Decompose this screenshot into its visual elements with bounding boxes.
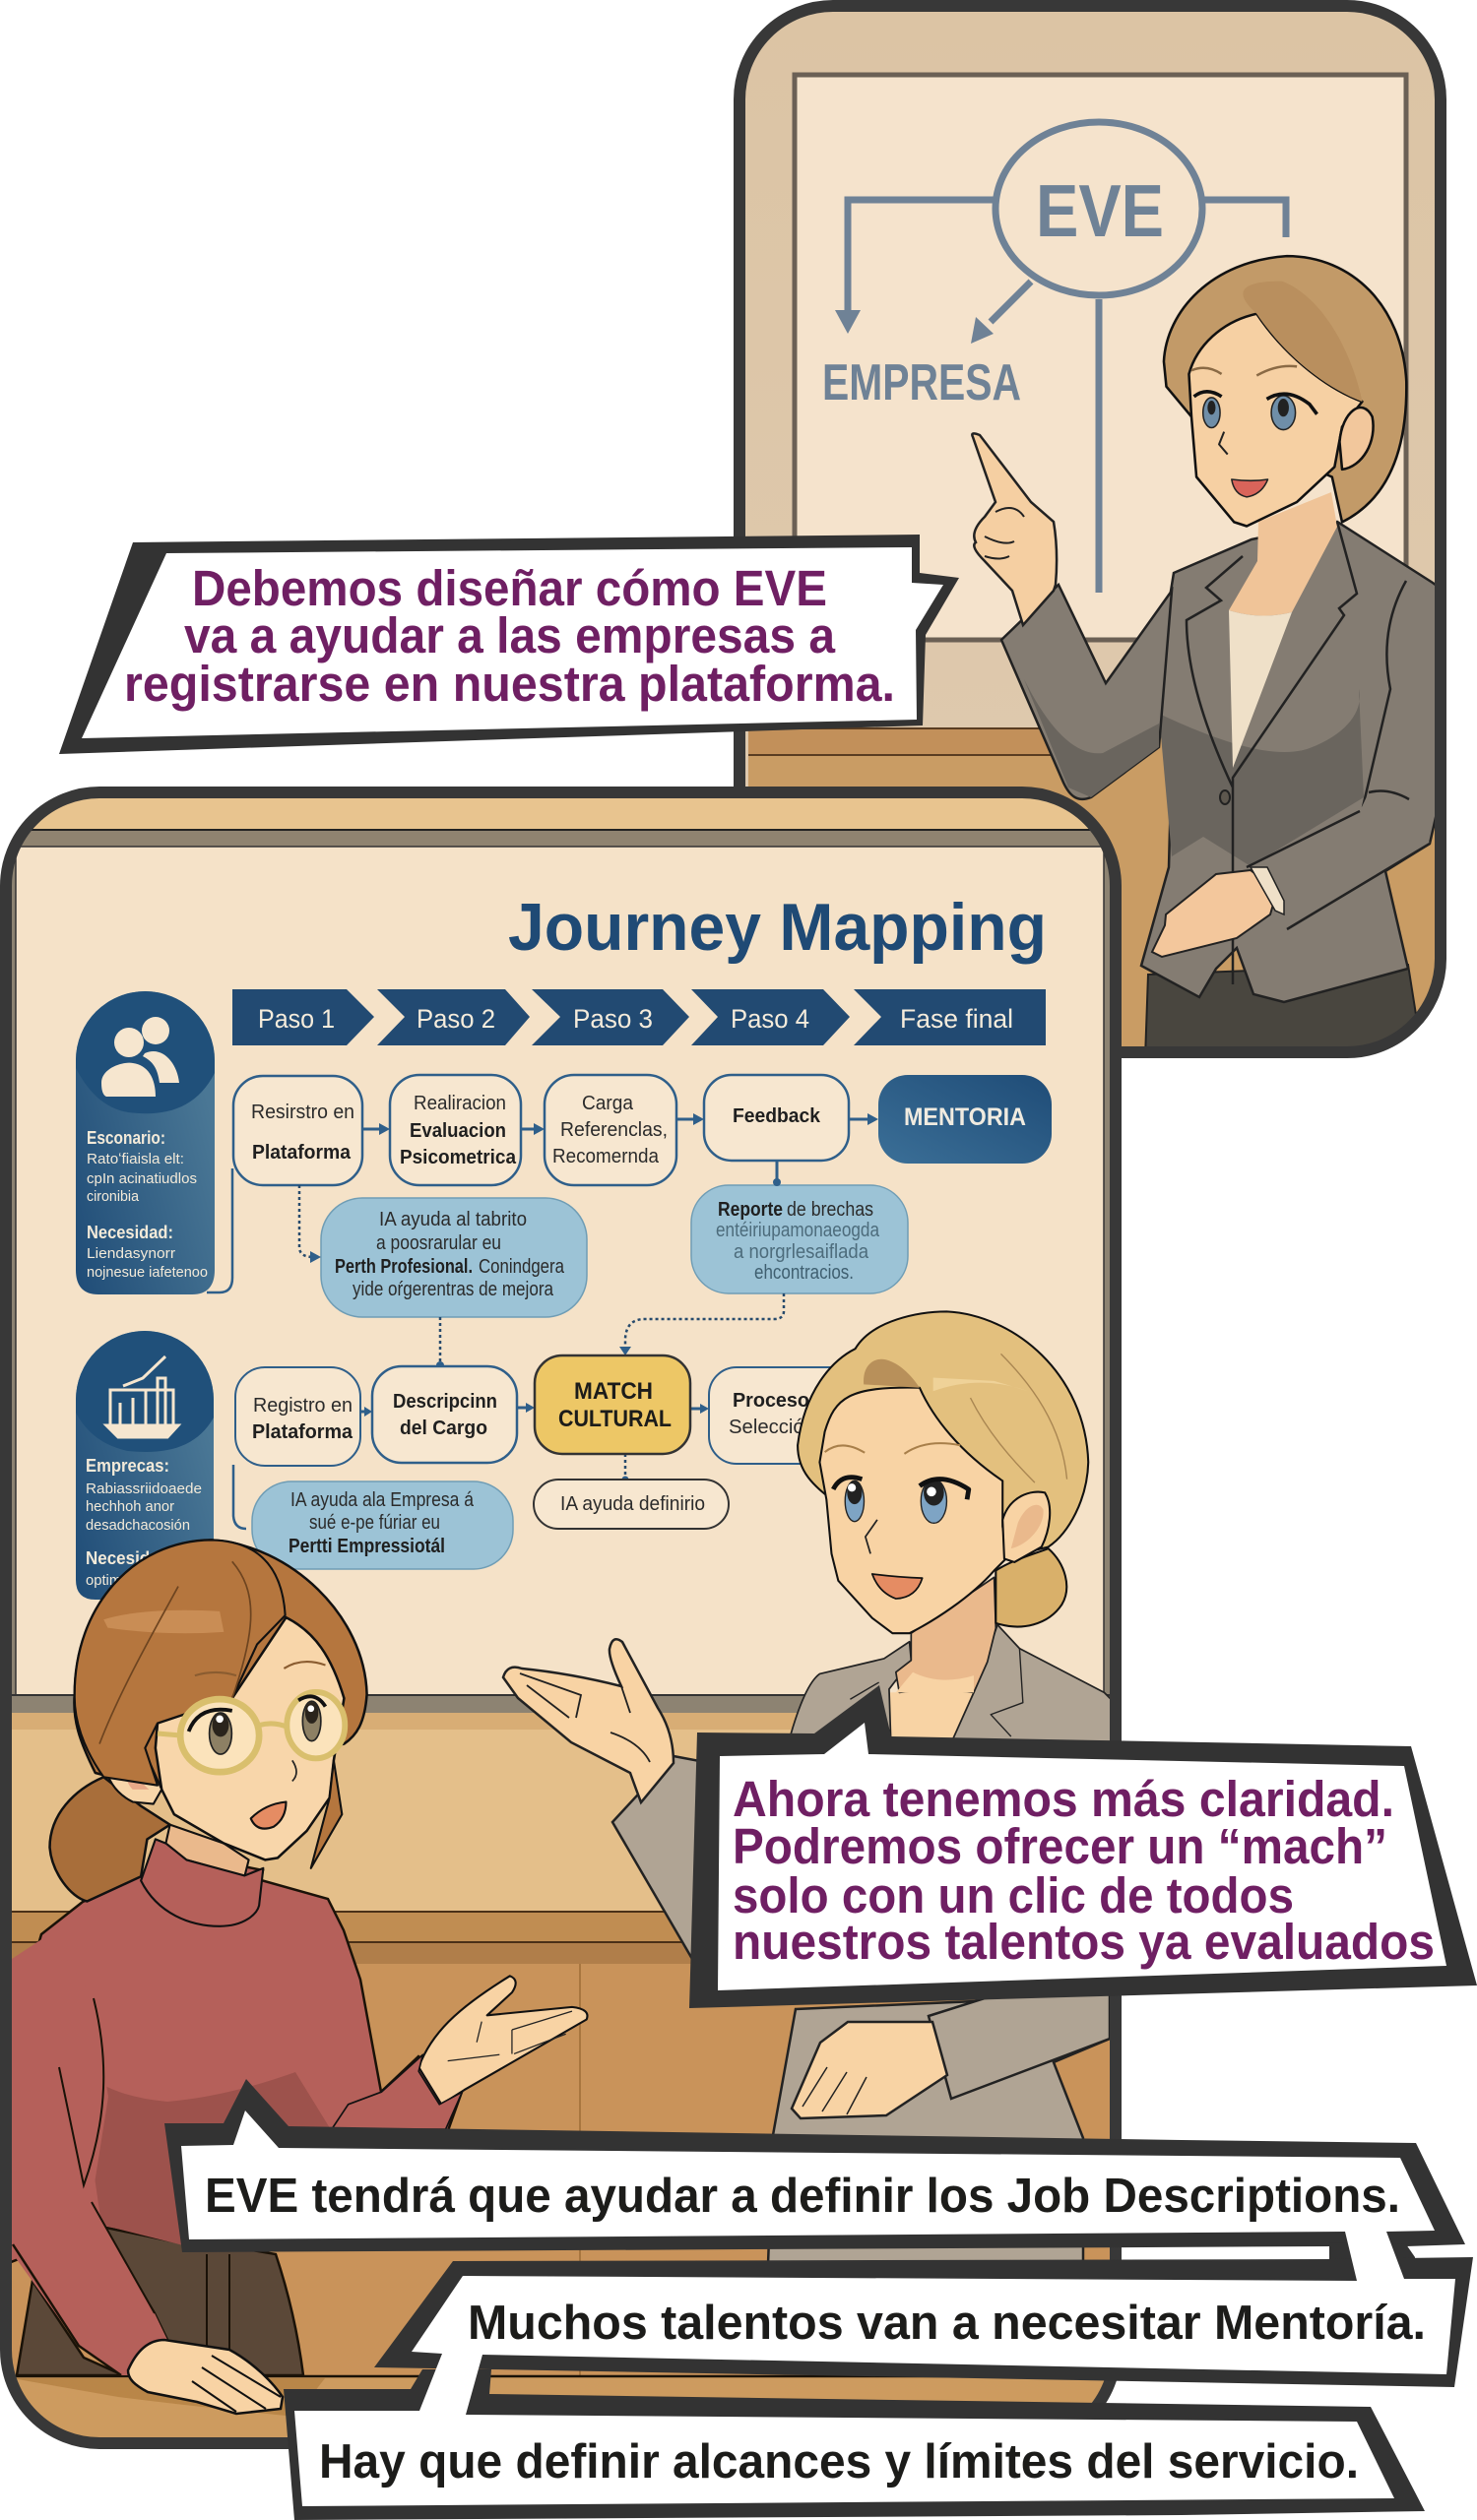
row 1 flow boxes: de brechas (787, 1199, 873, 1221)
step chevrons: Paso 1 (258, 1004, 335, 1034)
bubble text: Ahora tenemos más claridad. (733, 1771, 1394, 1827)
row 1 flow boxes: Psicometrica (400, 1147, 517, 1168)
bubble text (124, 560, 895, 712)
row 1 flow boxes: entéiriupamonaeogda (716, 1220, 880, 1241)
step chevrons: Paso 2 (417, 1004, 495, 1034)
Journey Mapping board (0, 847, 1123, 1713)
side panel: Escenario: Ratoʻfiaisla elt: (87, 1151, 184, 1167)
row 1 flow boxes: Resirstro en (251, 1102, 354, 1123)
row 1 flow boxes: Perth Profesional. (335, 1256, 473, 1278)
step chevrons: Fase final (900, 1004, 1013, 1034)
row 1 flow boxes: Recomernda (552, 1146, 660, 1167)
row 1 flow boxes: Carga (582, 1093, 634, 1114)
bubble text: va a ayudar a las empresas a (184, 607, 836, 663)
row 1 flow boxes: Referenclas, (560, 1119, 668, 1141)
step chevrons: Paso 3 (573, 1004, 653, 1034)
whiteboard with EVE diagram: EVE (1036, 169, 1164, 252)
row 2 flow boxes: del Cargo (400, 1418, 487, 1439)
step chevrons (232, 989, 1046, 1045)
row 2 flow boxes: Proceso (733, 1390, 809, 1412)
row 2 flow boxes: Registro en (253, 1395, 353, 1417)
row 1 flow boxes (233, 1075, 1052, 1317)
row 1 flow boxes: MENTORIA (904, 1103, 1026, 1131)
speech bubble: Debemos diseñar (59, 535, 959, 754)
step chevrons: Paso 4 (731, 1004, 809, 1034)
side panel: Empresas: optimizar (86, 1572, 145, 1589)
side panel: Escenario: Esconario: (87, 1128, 165, 1148)
row 2 flow boxes: MATCH (574, 1378, 653, 1405)
bubble text: alcances: Hay que definir alcances y límites del servicio. (319, 2435, 1359, 2488)
row 2 flow boxes: Pertti Empressiotál (289, 1536, 445, 1557)
bubble text: Debemos diseñar cómo EVE (192, 560, 827, 616)
side panel: Empresas: Necesidad (86, 1548, 169, 1568)
row 1 flow boxes: Realiracion (414, 1093, 506, 1114)
side panel: Empresas: Emprecas: (86, 1456, 169, 1476)
row 1 flow boxes: a poosrarular eu (376, 1232, 501, 1254)
linked speech bubbles: EVE tendrá, Muchos talentos, Hay que definir (164, 2079, 1473, 2520)
flow arrows and dotted connectors (233, 1113, 878, 1529)
row 2 flow boxes: IA ayuda definirio (560, 1493, 705, 1515)
whiteboard with EVE diagram (748, 75, 1438, 1053)
desk (16, 2374, 1105, 2437)
row 1 flow boxes: a norgrlesaiflada (734, 1241, 869, 1263)
row 1 flow boxes: Conindgera (479, 1256, 565, 1278)
row 2 flow boxes: CULTURAL (558, 1406, 672, 1432)
bubble text: nuestros talentos ya evaluados (733, 1914, 1435, 1970)
whiteboard with EVE diagram: EMPRESA (822, 354, 1021, 411)
row 2 flow boxes: Plataforma (252, 1421, 353, 1443)
side panel: Empresas (76, 1331, 214, 1600)
side panel: Escenario: Necesidad: (87, 1223, 173, 1242)
side panel: Escenario (76, 991, 232, 1294)
speech bubble: Ahora tenemos más claridad (689, 1685, 1477, 2008)
side panel: Escenario: Liendasynorr (87, 1245, 175, 1262)
character: colleague with glasses (6, 1540, 587, 2414)
panel: meeting with Journey Mapping board (0, 788, 1123, 2451)
panel: presenter at EVE board (734, 0, 1447, 1058)
character: presenter with brown hair (972, 256, 1444, 1058)
bubble text (733, 1771, 1435, 1970)
row 2 flow boxes: Descripcinn (393, 1391, 497, 1413)
bubble text: solo con un clic de todos (733, 1867, 1294, 1923)
row 1 flow boxes: Reporte (718, 1199, 783, 1221)
side panel: Empresas: Rabiassriidoaede (86, 1480, 202, 1497)
board title: Journey Mapping (508, 890, 1047, 965)
row 1 flow boxes: Feedback (733, 1105, 821, 1127)
side panel: Escenario: nojnesue iafetenoo (87, 1264, 208, 1281)
row 1 flow boxes: IA ayuda al tabrito (379, 1209, 527, 1230)
row 1 flow boxes: ehcontracios. (754, 1262, 854, 1284)
row 2 flow boxes (235, 1355, 886, 1569)
character: blonde colleague (503, 1311, 1111, 2264)
side panel: Empresas: desadchacosión (86, 1517, 190, 1534)
row 2 flow boxes: IA ayuda ala Empresa á (290, 1489, 475, 1511)
row 2 flow boxes: Selección (729, 1417, 815, 1438)
bubble text: job descriptions: EVE tendrá que ayudar a definir los Job Descriptions. (205, 2170, 1400, 2223)
row 1 flow boxes: Plataforma (252, 1142, 352, 1164)
side panel: Escenario: cpIn acinatiudlos (87, 1170, 197, 1187)
side panel: Escenario: cironibia (87, 1188, 140, 1205)
bubble text: Podremos ofrecer un “mach” (733, 1818, 1387, 1874)
row 1 flow boxes: Evaluacion (410, 1120, 506, 1142)
row 1 flow boxes: yide oŕgerentras de mejora (353, 1279, 554, 1300)
bubble text: registrarse en nuestra plataforma. (124, 656, 895, 712)
bubble text: mentoría: Muchos talentos van a necesitar Mentoría. (468, 2297, 1426, 2350)
side panel: Empresas: hechhoh anor (86, 1498, 174, 1515)
row 2 flow boxes: sué e-pe fúriar eu (309, 1512, 440, 1534)
